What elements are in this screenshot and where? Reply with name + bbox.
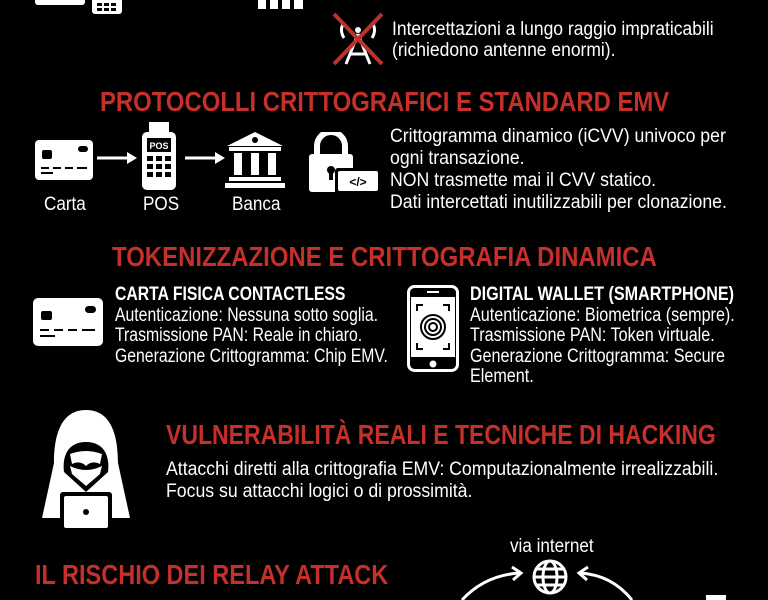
diagram: carta pos banca: Banca: [232, 194, 280, 215]
icon: top card fragment: [35, 0, 122, 14]
icon: card: [35, 140, 93, 180]
icon: crossed antenna: [332, 12, 384, 66]
text: vulnerabilita: Focus su attacchi logici o di prossimità.: [166, 481, 472, 502]
icon: top bars fragment: [258, 0, 303, 9]
text: long range interception: [392, 19, 714, 61]
panel: physical card: [33, 284, 388, 366]
text: vulnerabilita: Attacchi diretti alla crittografia EMV: Computazionalmente irrealizzabili.: [166, 459, 718, 480]
arrow: [97, 152, 137, 164]
icon: phone fingerprint: [407, 285, 459, 372]
text: long range interception: (richiedono antenne enormi).: [392, 40, 615, 61]
labels: Carta: [44, 194, 86, 215]
text: Element.: [470, 366, 534, 387]
text: vulnerabilita: [166, 459, 718, 502]
text: Autenticazione: Nessuna sotto soglia.: [115, 304, 378, 326]
icon: POS: POS: [149, 141, 169, 151]
diagram: relay globe arrows: [461, 560, 726, 600]
heading: relay attack: IL RISCHIO DEI RELAY ATTACK: [35, 559, 388, 590]
diagram: carta pos banca: POS: [143, 194, 179, 215]
text: Generazione Crittogramma: Chip EMV.: [115, 346, 388, 366]
icon: lock code: </>: [349, 175, 367, 189]
icon: POS: [142, 122, 176, 190]
text: Autenticazione: Biometrica (sempre).: [470, 304, 735, 326]
text: EMV facts: [390, 126, 727, 213]
heading: vulnerabilita: VULNERABILITÀ REALI E TECNICHE DI HACKING: [166, 419, 716, 450]
arrow: [185, 152, 225, 164]
icon: hacker: [42, 410, 130, 528]
text: EMV facts: Dati intercettati inutilizzabili per clonazione.: [390, 192, 727, 213]
icon: card: [33, 298, 103, 346]
text: Trasmissione PAN: Reale in chiaro.: [115, 325, 362, 346]
label: via internet: via internet: [510, 536, 594, 557]
text: [470, 284, 735, 387]
text: CARTA FISICA CONTACTLESS: [115, 284, 345, 305]
heading: tokenizzazione: TOKENIZZAZIONE E CRITTOGRAFIA DINAMICA: [112, 241, 657, 272]
icon: lock code: [309, 132, 378, 192]
diagram: carta pos banca: [35, 122, 378, 215]
text: Generazione Crittogramma: Secure: [470, 346, 725, 366]
text: EMV facts: Crittogramma dinamico (iCVV) univoco per: [390, 126, 726, 147]
text: DIGITAL WALLET (SMARTPHONE): [470, 284, 734, 305]
heading: protocolli: PROTOCOLLI CRITTOGRAFICI E STANDARD EMV: [100, 86, 669, 117]
panel: digital wallet: [407, 284, 735, 387]
text: EMV facts: NON trasmette mai il CVV statico.: [390, 170, 656, 191]
text: long range interception: Intercettazioni a lungo raggio impraticabili: [392, 19, 714, 40]
icon: bank: [225, 132, 285, 188]
text: EMV facts: ogni transazione.: [390, 148, 525, 169]
text: Trasmissione PAN: Token virtuale.: [470, 325, 715, 346]
text: [115, 284, 388, 366]
